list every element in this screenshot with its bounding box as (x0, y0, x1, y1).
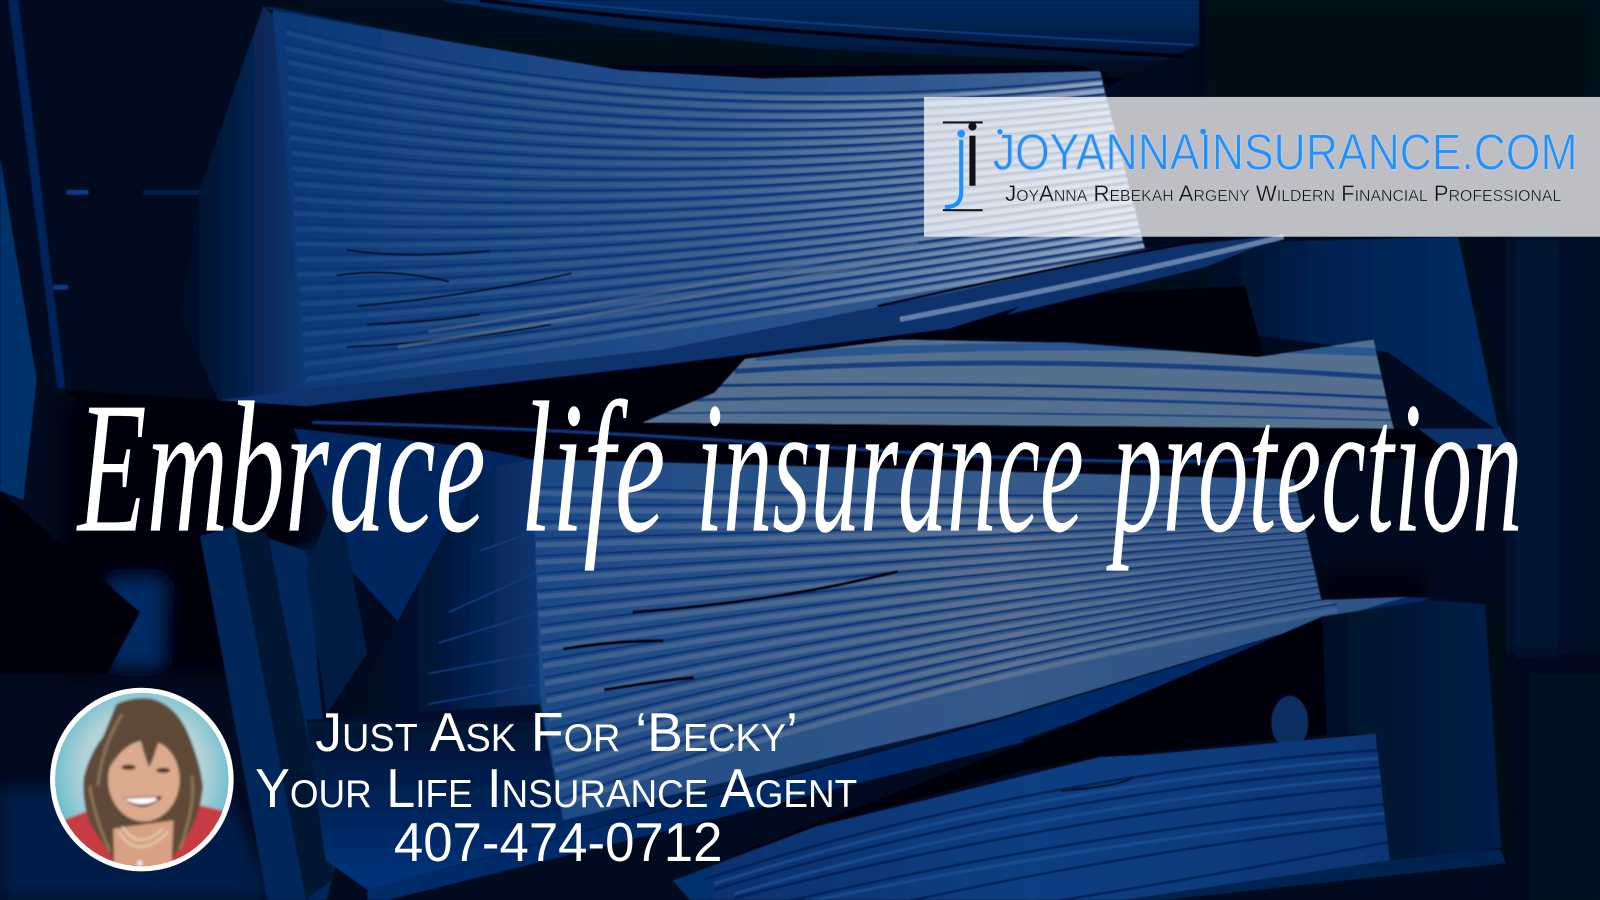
necklace (118, 827, 168, 847)
top binder spine (180, 6, 311, 403)
third binder cover wedge (294, 429, 531, 633)
fourth binder cover (306, 704, 1000, 890)
red blouse (64, 804, 224, 866)
third binder pages (533, 459, 1406, 820)
top binder cover (263, 0, 1199, 84)
top binder pages (272, 10, 1145, 390)
title (76, 364, 1522, 572)
title: Embrace (76, 364, 486, 572)
line: just ask for Becky: Just Ask For ‘Becky’ (315, 701, 798, 763)
second binder pages (643, 340, 1394, 429)
chest (113, 820, 173, 867)
right cover, second binder (1020, 237, 1502, 434)
logo panel (924, 97, 1600, 237)
left binder edge (0, 156, 37, 500)
black band between binders (63, 390, 1510, 480)
title: insurance (696, 364, 1084, 572)
binder ring (1271, 696, 1308, 749)
agent name and title: JoyAnna Rebekah Argeny Wildern Financial Professional (1005, 181, 1561, 206)
black shadow behind lower stack (714, 616, 1327, 862)
title: life (520, 364, 665, 572)
hair (83, 698, 203, 860)
phone number: 407-474-0712 (394, 811, 722, 873)
contact text (255, 701, 857, 873)
top binder lower edge (113, 235, 1288, 423)
line: your life insurance agent: Your Life Insurance Agent (255, 757, 857, 819)
logo mark: ji monogram (943, 121, 983, 211)
face (108, 738, 180, 821)
fourth binder pages (672, 734, 1390, 900)
third binder fanned pages side (347, 459, 563, 820)
portrait of agent (50, 688, 235, 878)
back cover lower right (1322, 600, 1502, 867)
